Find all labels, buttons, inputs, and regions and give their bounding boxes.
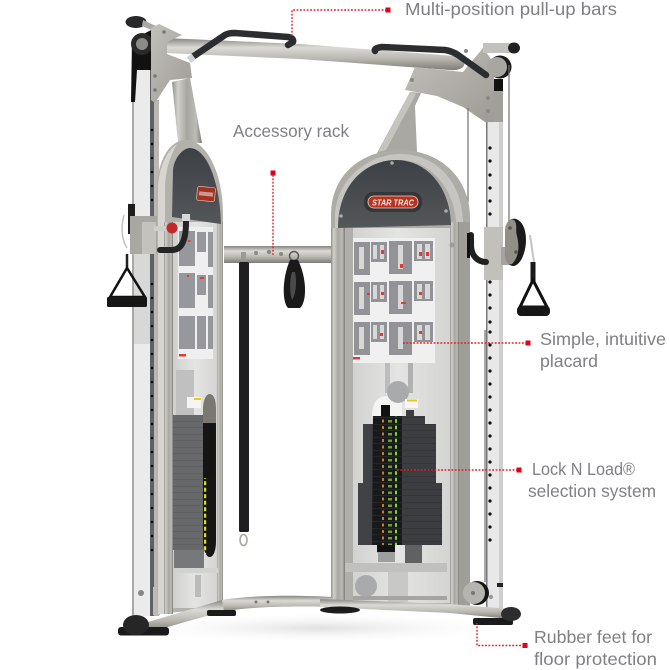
callout: rubber feet: floor protection: [534, 649, 657, 669]
callout: accessory rack: [233, 121, 349, 256]
machine photo: functional trainer: [107, 16, 550, 636]
callout: accessory rack: Accessory rack: [233, 121, 349, 141]
left cable carriage: [128, 204, 190, 254]
callout: simple, intuitive placard: Simple, intuitive: [540, 329, 666, 349]
callout: lock n load selection system: Lock N Load®: [532, 459, 635, 479]
accessory rack bar: [224, 246, 331, 263]
left leg: [148, 600, 224, 632]
callout: simple, intuitive placard: placard: [540, 351, 598, 371]
callout: rubber feet: Rubber feet for: [534, 627, 652, 647]
right top pulley: [483, 42, 520, 123]
loop strap: [284, 252, 305, 308]
callout: simple, intuitive placard: [403, 329, 666, 371]
callout: lock n load selection system: [397, 459, 656, 501]
right tower: [331, 150, 470, 608]
left top pulley: [126, 16, 158, 102]
left upright strut: [172, 78, 202, 143]
right leg: [320, 599, 512, 619]
foot pads: [320, 606, 360, 614]
left tower: [157, 140, 223, 614]
resistance rod: [239, 262, 249, 546]
right cable column: [486, 122, 503, 608]
right pull-up bar: [375, 47, 486, 75]
right logo badge: [364, 192, 422, 212]
left placard: [178, 227, 213, 359]
callout: lock n load selection system: selection system: [528, 481, 656, 501]
left weight stack: [173, 370, 218, 597]
callout: multi-position pull-up bars: [292, 0, 617, 36]
right upright strut: [377, 92, 421, 153]
base frame: [118, 596, 521, 636]
left triangle handle: [107, 215, 147, 307]
right cable carriage: [467, 219, 534, 280]
right placard: [353, 238, 435, 363]
right triangle handle: [517, 262, 550, 316]
right top bracket plate: [405, 48, 494, 124]
top cross bar: [165, 38, 464, 70]
left rubber foot: [118, 627, 169, 636]
curved cross member: [222, 596, 333, 612]
left logo badge: [196, 186, 216, 202]
left cable column: [132, 68, 160, 616]
right weight stack: [345, 363, 447, 602]
left adjustment hook: [160, 222, 186, 250]
callout: rubber feet: [477, 623, 657, 669]
floor shadow: [120, 612, 520, 644]
right logo badge: STAR TRAC: [372, 198, 415, 208]
right dark panel: [338, 160, 451, 228]
cables: [468, 65, 509, 582]
right lower pulley: [463, 581, 489, 605]
right end cap: [501, 607, 521, 621]
left top bracket plate: [151, 24, 192, 103]
left pull-up bar: [194, 33, 293, 56]
right adjustment hook: [471, 235, 486, 262]
left dark panel: [172, 148, 221, 224]
